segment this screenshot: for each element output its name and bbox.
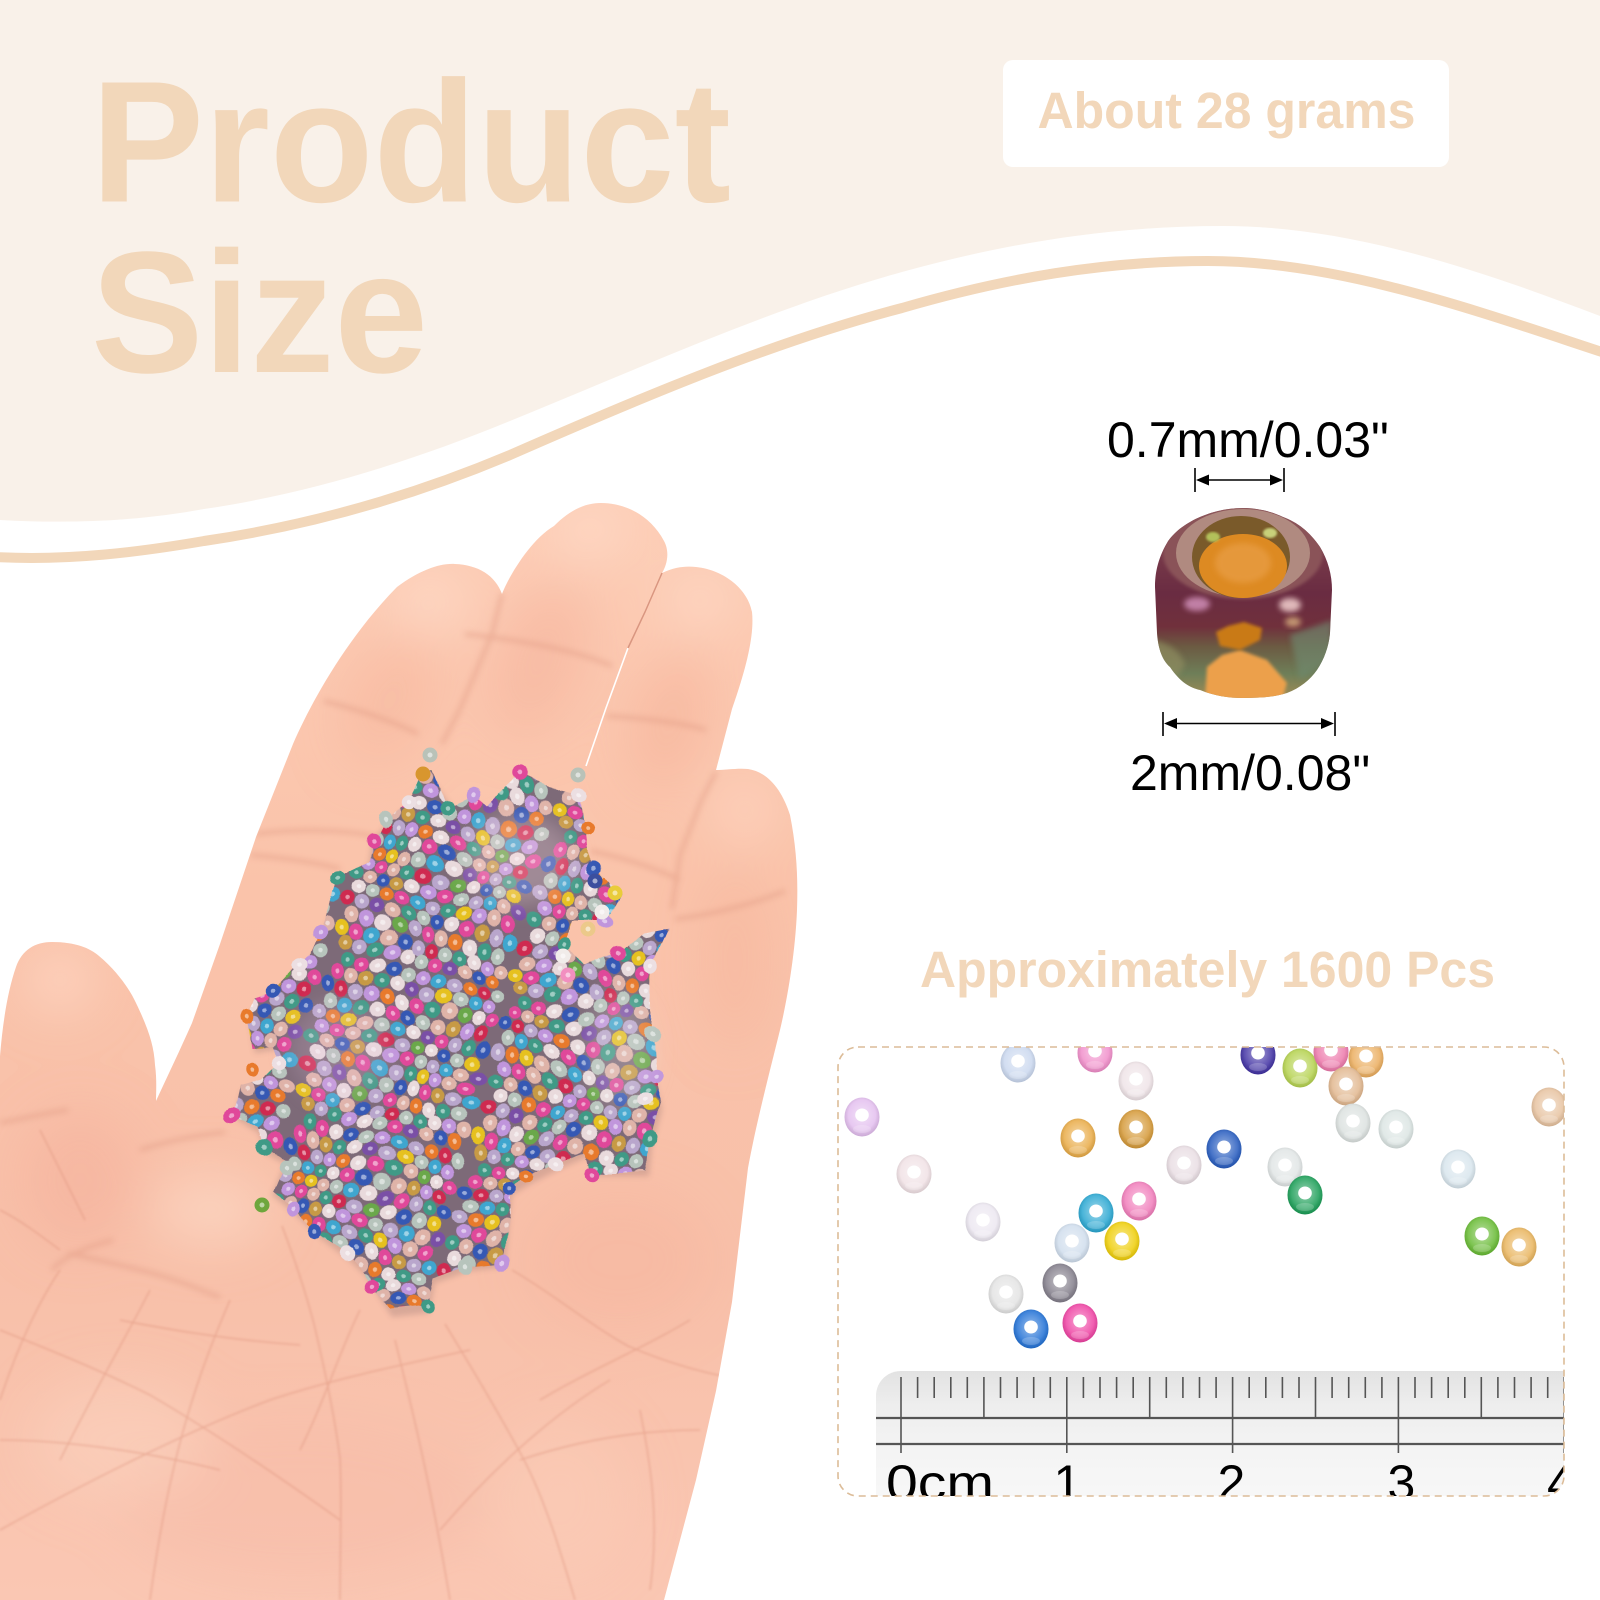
ruler numerals: 1 <box>1054 1455 1081 1511</box>
ruler numerals <box>888 1465 1564 1496</box>
heading: quantity: Approximately 1600 Pcs <box>920 941 1495 998</box>
title: Product <box>91 44 731 238</box>
ruler numerals: 0cm <box>886 1455 994 1511</box>
gap between fingers <box>586 648 628 766</box>
ruler <box>876 1371 1564 1496</box>
wave accent line <box>0 261 1600 558</box>
pale tint zones of the bead pile <box>290 815 655 1110</box>
large bead close-up <box>1150 505 1340 701</box>
scattered beads <box>844 1032 1566 1348</box>
ruler numerals: 2 <box>1218 1455 1245 1511</box>
beads softening the pile edge <box>233 776 653 1308</box>
bead hole <box>1192 516 1290 598</box>
panel: beads with ruler <box>837 1046 1565 1497</box>
ruler numerals: 4 <box>1547 1455 1575 1511</box>
hand photo illustration <box>0 503 797 1600</box>
badge: about 28 grams: About 28 grams <box>1038 82 1416 139</box>
lower orange patches <box>1205 650 1287 700</box>
background: beige wave header <box>0 0 1600 522</box>
badge: about 28 grams <box>1003 60 1449 167</box>
label: hole diameter: 0.7mm/0.03" <box>1107 412 1389 468</box>
finger creases and folds <box>0 594 785 1297</box>
ruler numerals: 3 <box>1388 1455 1415 1511</box>
arrow: bead width dimension <box>1163 712 1335 736</box>
top rim <box>1176 509 1310 597</box>
palm lines <box>0 1130 732 1600</box>
title <box>91 44 731 409</box>
dashed panel border <box>838 1047 1564 1496</box>
arrow: hole width dimension <box>1195 468 1284 492</box>
title: Size <box>91 215 428 409</box>
loose beads <box>262 755 615 1205</box>
seed bead pile in palm <box>233 755 670 1317</box>
label: bead diameter: 2mm/0.08" <box>1130 745 1370 801</box>
